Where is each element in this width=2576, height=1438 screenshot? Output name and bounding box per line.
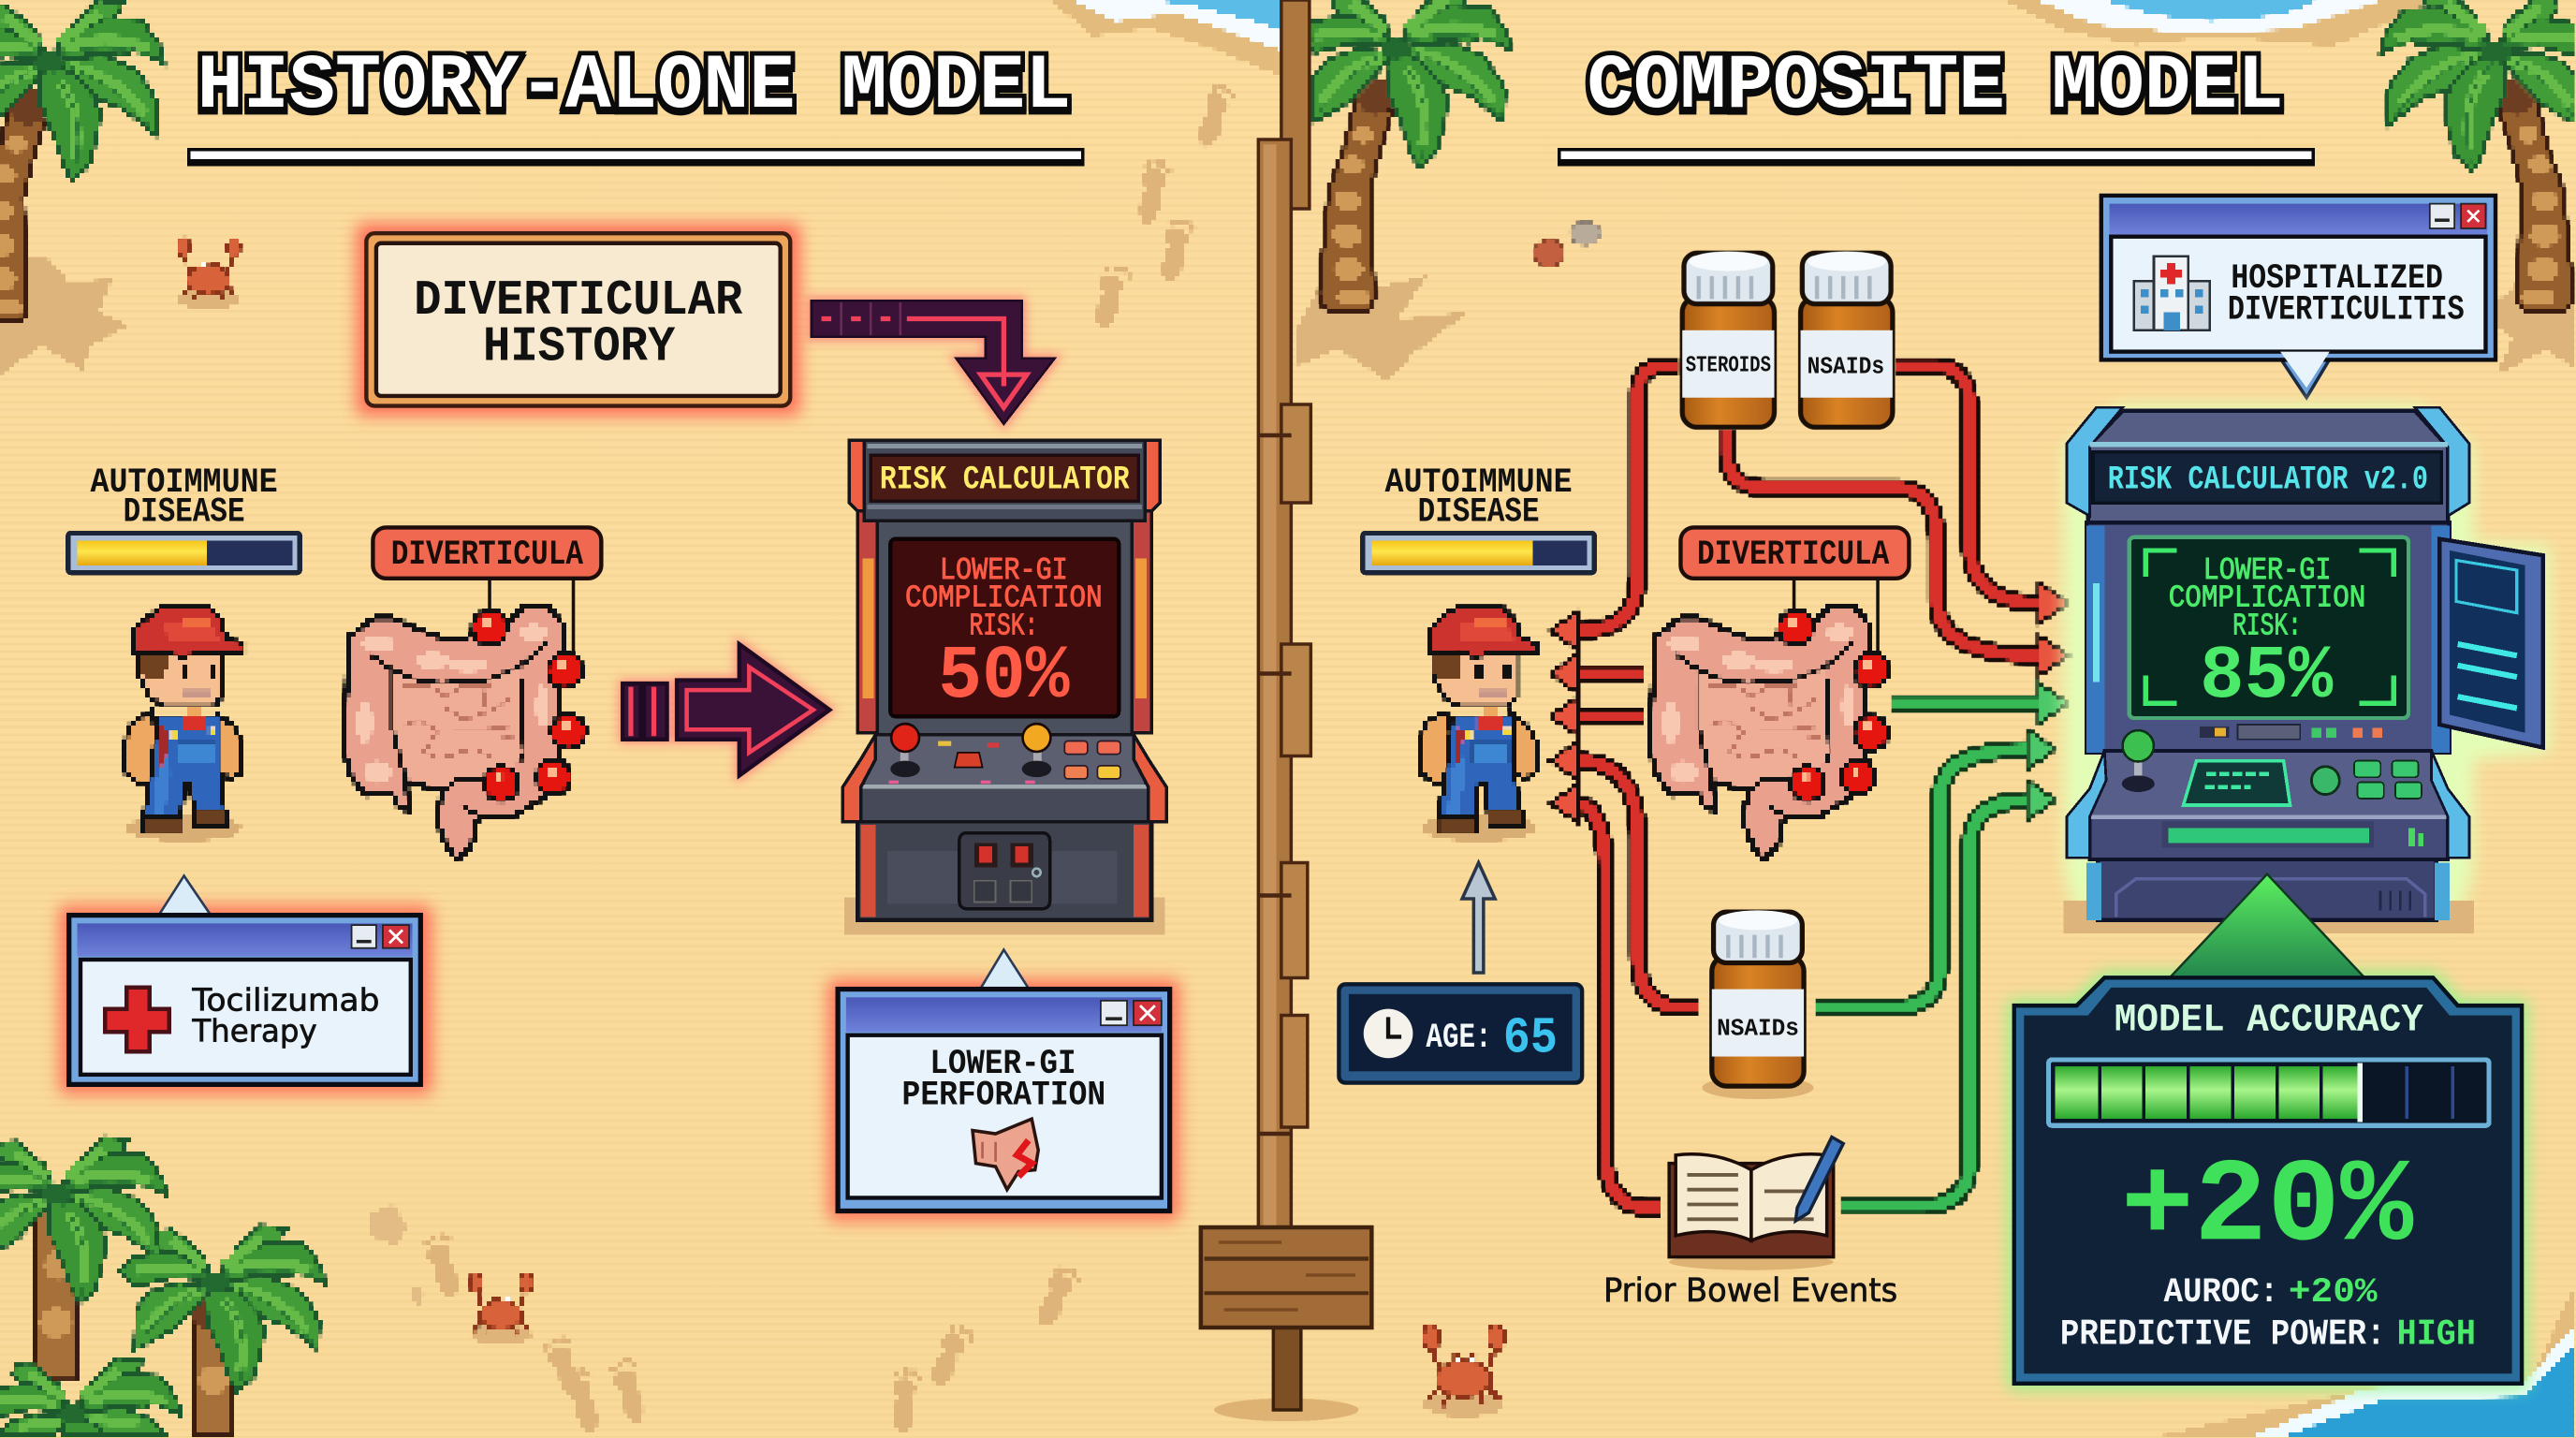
character <box>124 608 243 842</box>
screen: 50 percent: COMPLICATION <box>905 581 1103 617</box>
age indicator <box>1339 862 1582 1083</box>
right patient status <box>1360 463 1597 842</box>
bottle: nsaids bottom <box>1702 910 1814 1099</box>
label: diverticula <box>1680 527 1909 579</box>
cabinet sides <box>857 511 1151 733</box>
palm tree: top left <box>0 0 165 322</box>
arrow: intestine to calculator <box>622 644 829 775</box>
panel: model accuracy <box>2014 874 2522 1384</box>
bottle: steroids <box>1682 252 1775 427</box>
label: autoimmune disease: DISEASE <box>124 492 245 532</box>
palm shadows <box>0 257 2576 381</box>
pebbles <box>1534 222 1600 266</box>
bottle: steroids: STEROIDS <box>1686 354 1771 379</box>
footprints and sand details <box>372 81 1238 1435</box>
health bar <box>1360 531 1597 575</box>
console <box>2088 751 2448 816</box>
arrow: age to patient <box>1462 862 1495 973</box>
left patient status <box>66 463 302 842</box>
left title underline <box>187 148 1084 166</box>
crabs <box>177 238 1504 1416</box>
label: autoimmune disease: AUTOIMMUNE <box>91 463 278 503</box>
panel: diverticular history <box>357 224 800 416</box>
green pointer triangle <box>2162 874 2372 986</box>
palm trees: bottom left group <box>0 1137 326 1434</box>
screen: 50 percent: LOWER-GI <box>940 553 1068 589</box>
heading: diverticular history: HISTORY <box>483 318 676 374</box>
intestine with diverticula, right <box>1649 527 1909 859</box>
marquee: RISK CALCULATOR <box>880 461 1130 498</box>
callout: tocilizumab therapy <box>59 875 432 1094</box>
heading: model accuracy: MODEL ACCURACY <box>2115 997 2423 1042</box>
screen: 85 percent: COMPLICATION <box>2169 581 2365 617</box>
label: prior bowel events: Prior Bowel Events <box>1603 1271 1897 1310</box>
shoreline: bottom right <box>2152 1282 2576 1438</box>
arrow: history to calculator <box>812 301 1055 424</box>
red risk arrows to patient <box>1551 366 1697 1208</box>
base cabinet <box>2098 859 2437 920</box>
shoreline: top right <box>2002 0 2438 46</box>
icon: medical cross <box>105 988 169 1051</box>
marquee <box>2093 452 2441 503</box>
controls <box>2067 725 2469 859</box>
screen: 85 percent: RISK: <box>2232 609 2302 644</box>
icon: book and pen <box>1669 1137 1843 1270</box>
side tablet <box>2439 539 2543 748</box>
text: age 65: AGE: <box>1426 1019 1492 1058</box>
screen: 50 percent <box>890 539 1119 720</box>
label: autoimmune disease: AUTOIMMUNE <box>1385 463 1573 503</box>
red risk arrows to calculator <box>1727 366 2069 675</box>
text: lower-gi perforation: PERFORATION <box>902 1076 1105 1115</box>
top housing <box>2088 411 2448 522</box>
wooden sign post <box>1201 1227 1372 1421</box>
text: lower-gi perforation: LOWER-GI <box>929 1045 1076 1084</box>
text: auroc: +20% <box>2289 1273 2378 1313</box>
wooden divider post <box>1258 0 1311 1232</box>
arcade cabinet: risk calculator v2 <box>2063 404 2550 933</box>
label: diverticula: DIVERTICULA <box>1697 536 1890 575</box>
character <box>1419 608 1538 842</box>
progress bar <box>2049 1060 2489 1125</box>
text: predictive power: PREDICTIVE POWER: <box>2060 1314 2385 1356</box>
screen: 85 percent: LOWER-GI <box>2203 553 2331 589</box>
prior bowel events <box>1603 1137 1897 1310</box>
palm tree: top right <box>2380 0 2576 312</box>
text: hospitalized diverticulitis: DIVERTICULITIS <box>2228 290 2465 330</box>
text: tocilizumab therapy: Therapy <box>191 1013 317 1049</box>
screen: 50 percent: 50% <box>938 635 1070 720</box>
age indicator: 65 <box>1503 1010 1558 1067</box>
green protective arrows to calculator <box>1817 683 2069 1206</box>
controls <box>889 724 1120 784</box>
icon: clock <box>1364 1009 1412 1058</box>
intestine with diverticula, left <box>344 527 601 859</box>
bottle: nsaids bottom: NSAIDs <box>1717 1015 1799 1043</box>
metric: plus 20 percent: +20% <box>2121 1140 2413 1274</box>
icon: perforated bowel <box>973 1119 1038 1190</box>
bottle: nsaids top <box>1801 252 1893 427</box>
shoreline: top left <box>1051 0 1288 79</box>
text: hospitalized diverticulitis: HOSPITALIZED <box>2231 259 2443 299</box>
screen: 85 percent: 85% <box>2200 635 2334 720</box>
icon: hospital <box>2134 257 2210 330</box>
callout: lower-gi perforation <box>828 949 1179 1221</box>
label: diverticula <box>373 527 601 579</box>
coin door <box>959 833 1050 909</box>
text: tocilizumab therapy: Tocilizumab <box>191 981 379 1018</box>
screen: 85 percent <box>2130 537 2408 720</box>
left title: HISTORY-ALONE MODEL <box>198 42 1071 130</box>
arcade cabinet: risk calculator <box>842 440 1166 935</box>
heading: diverticular history: DIVERTICULAR <box>414 272 743 329</box>
screen: 50 percent: RISK: <box>970 609 1038 644</box>
right title: COMPOSITE MODEL <box>1587 42 2284 130</box>
control panel <box>862 735 1147 787</box>
bottle: nsaids top: NSAIDs <box>1808 352 1884 380</box>
body <box>2086 522 2450 753</box>
label: diverticula: DIVERTICULA <box>391 536 584 575</box>
marquee: RISK CALCULATOR v2.0 <box>2108 461 2428 498</box>
callout: hospitalized diverticulitis <box>2101 196 2496 398</box>
right title underline <box>1558 148 2315 166</box>
label: autoimmune disease: DISEASE <box>1418 492 1540 532</box>
text: predictive power: HIGH <box>2397 1314 2476 1356</box>
text: auroc: AUROC: <box>2163 1273 2278 1313</box>
palm tree: center <box>1298 0 1512 312</box>
health bar <box>66 531 302 575</box>
